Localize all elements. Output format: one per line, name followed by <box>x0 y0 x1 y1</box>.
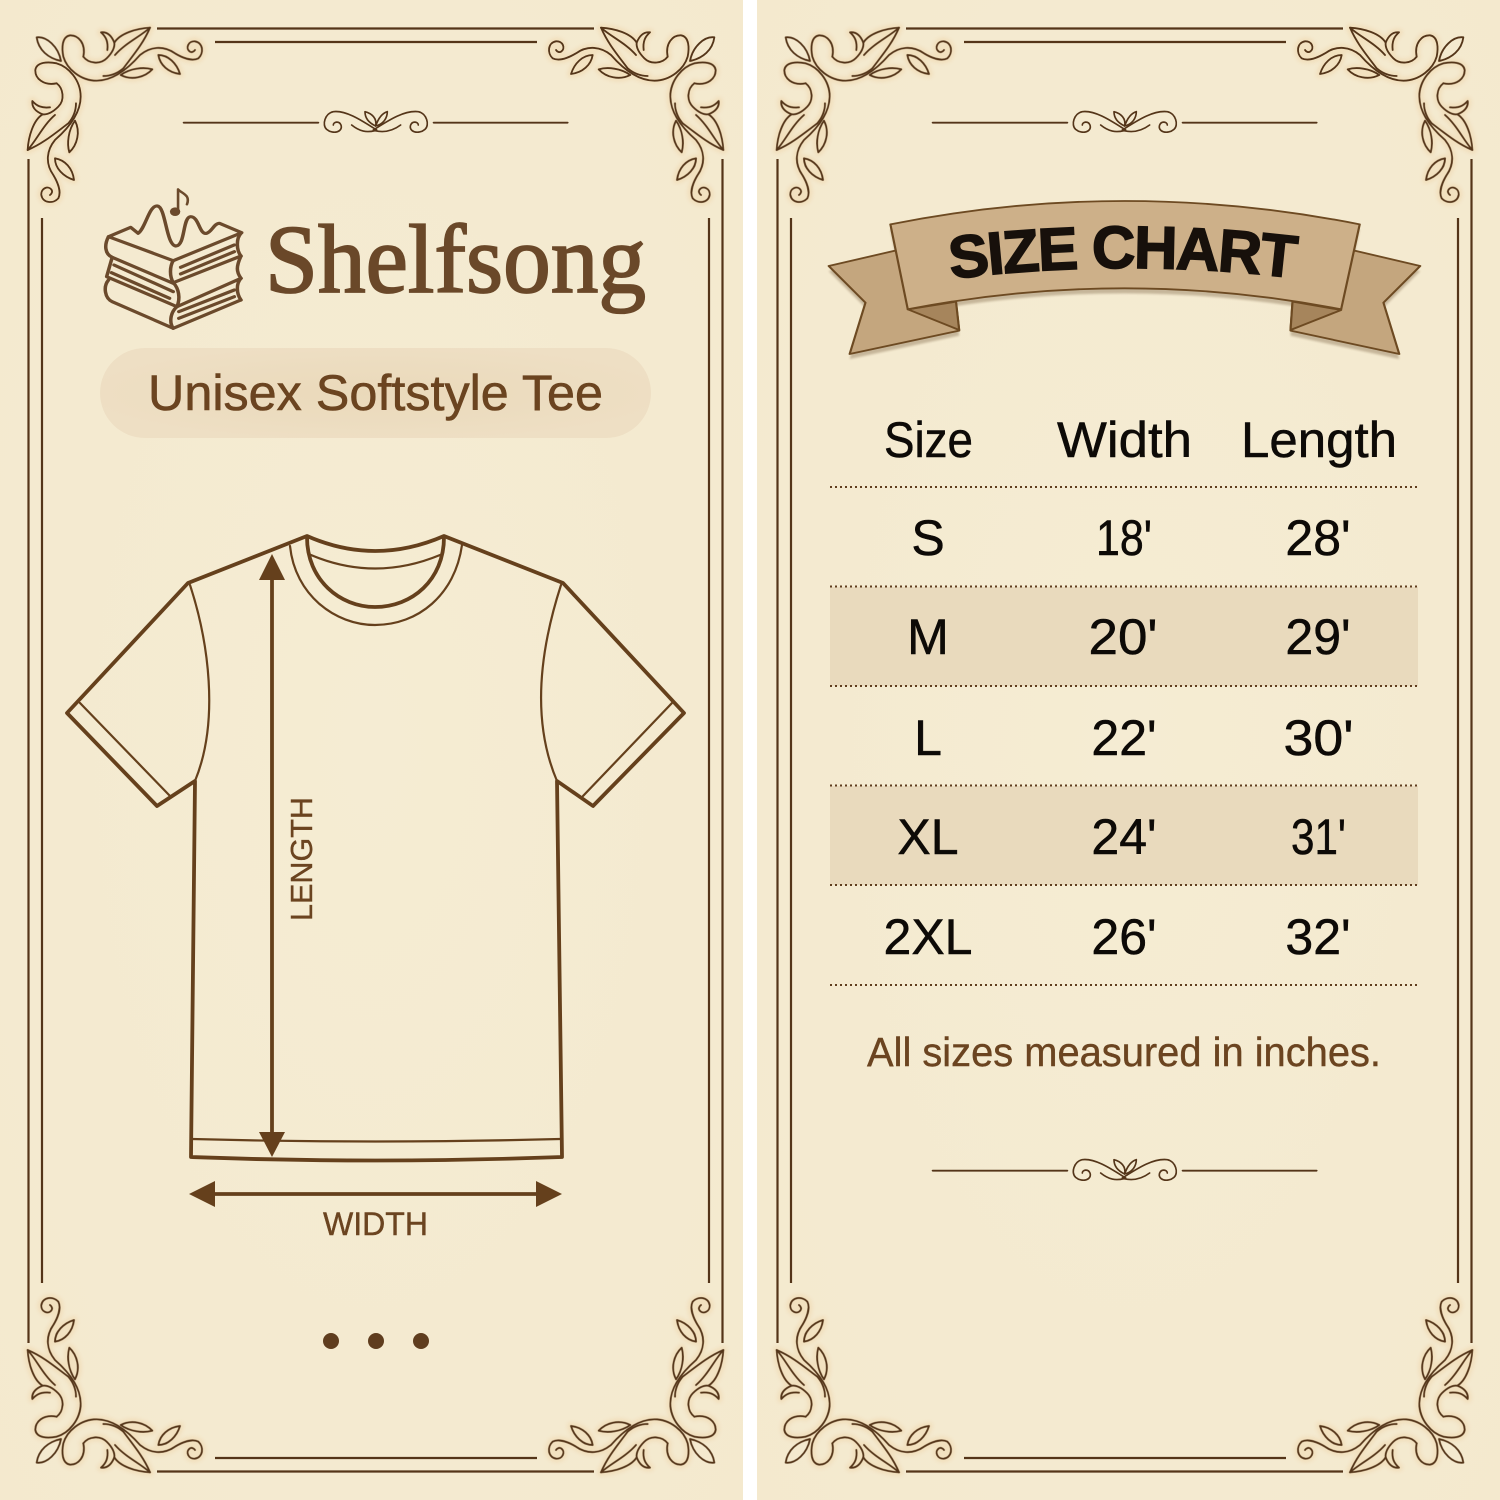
row S: S <box>911 510 945 566</box>
row S: 18' <box>1096 510 1152 566</box>
row S: 28' <box>1285 510 1351 566</box>
table header: Width <box>1057 412 1192 468</box>
row L <box>914 710 1354 766</box>
row XL <box>897 809 1346 865</box>
left top flourish divider <box>184 112 568 132</box>
panel: size chart <box>757 0 1500 1500</box>
ribbon banner <box>828 200 1422 360</box>
row 2XL: 2XL <box>884 909 972 965</box>
table row highlights <box>830 587 1418 885</box>
row XL: 31' <box>1291 809 1346 865</box>
table header: Length <box>1241 412 1397 468</box>
row L: 22' <box>1091 710 1157 766</box>
width label: WIDTH <box>323 1206 428 1242</box>
right panel background <box>757 0 1500 1500</box>
row M: 29' <box>1285 609 1351 665</box>
t-shirt outline <box>67 536 684 1160</box>
row 2XL <box>884 909 1351 965</box>
row XL: 24' <box>1091 809 1157 865</box>
left panel background <box>0 0 743 1500</box>
table header <box>884 412 1397 468</box>
row 2XL: 32' <box>1285 909 1351 965</box>
row 2XL: 26' <box>1091 909 1157 965</box>
pagination dots <box>323 1333 429 1349</box>
row M <box>907 609 1351 665</box>
product name pill <box>100 348 651 438</box>
row L: L <box>914 710 942 766</box>
brand name: Shelfsong <box>265 206 646 314</box>
table header: Size <box>884 412 973 468</box>
right top flourish divider <box>933 112 1317 132</box>
row M: 20' <box>1088 609 1158 665</box>
row L: 30' <box>1284 710 1354 766</box>
length label: LENGTH <box>284 797 319 921</box>
table body <box>884 510 1354 965</box>
left panel ornamental frame <box>28 28 723 1472</box>
product name pill: Unisex Softstyle Tee <box>148 365 603 421</box>
row S <box>911 510 1351 566</box>
row XL: XL <box>897 809 959 865</box>
arrow: width <box>189 1181 562 1207</box>
table dotted rules <box>830 487 1418 985</box>
right panel ornamental frame <box>777 28 1472 1472</box>
arrow: length <box>259 554 285 1157</box>
ribbon banner: SIZE CHART <box>950 225 1300 278</box>
row M: M <box>907 609 949 665</box>
footnote: All sizes measured in inches. <box>867 1029 1381 1075</box>
icon: books with music note <box>105 189 242 328</box>
panel: product diagram <box>0 0 743 1500</box>
right bottom flourish divider <box>933 1160 1317 1180</box>
